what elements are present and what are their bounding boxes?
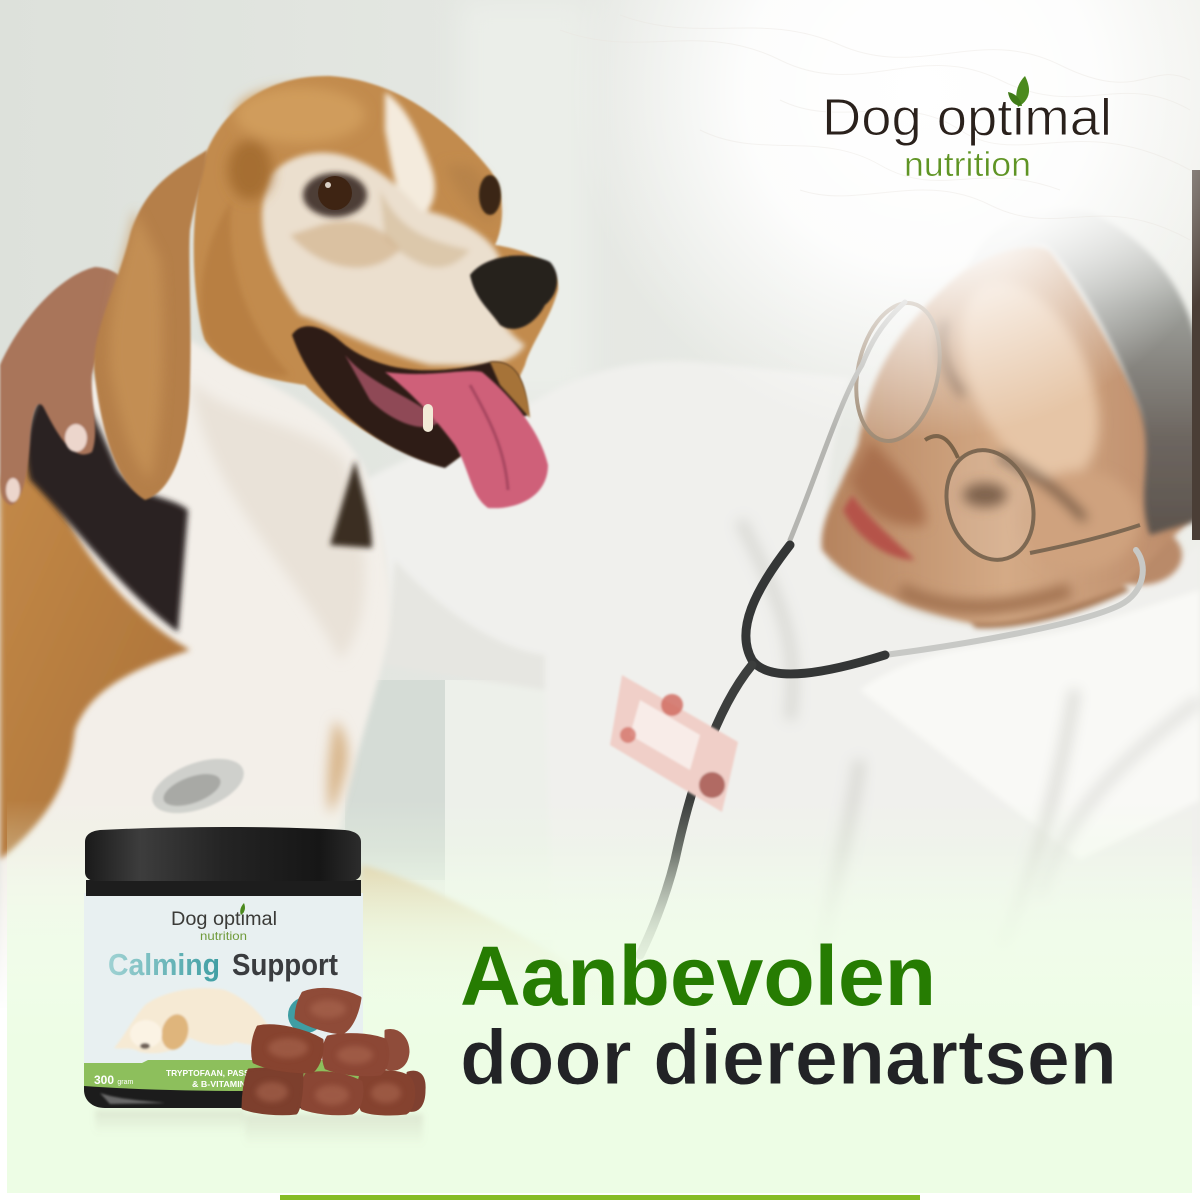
black saddle bbox=[26, 368, 188, 632]
ear bbox=[94, 150, 207, 500]
name badge bbox=[610, 675, 738, 812]
head white markings: blaze, cheek and muzzle bbox=[201, 92, 525, 376]
product jar: Calming Support: & B-VITAMINE bbox=[192, 1079, 252, 1089]
product jar: Calming Support: nutrition bbox=[200, 929, 247, 943]
jar neck bbox=[86, 880, 361, 896]
decorative wave pattern bbox=[560, 15, 1190, 240]
icon: leaves bbox=[1008, 76, 1029, 107]
glasses bbox=[844, 295, 1140, 571]
neck bbox=[960, 570, 1130, 628]
logo sub wordmark: nutrition bbox=[904, 146, 1031, 184]
soft chews stack bbox=[243, 989, 424, 1114]
nose bbox=[470, 256, 557, 329]
jar teal badge bbox=[288, 997, 324, 1033]
jar weight text: 300 gram bbox=[94, 1073, 133, 1087]
chest shading bbox=[190, 380, 365, 815]
headline bbox=[460, 929, 1117, 1101]
product jar: Calming Support: Support bbox=[232, 947, 338, 982]
dark patch neck bbox=[330, 460, 372, 548]
face shading: forehead highlight, nose, mouth bbox=[850, 260, 1140, 607]
vet forearm lower left bbox=[330, 865, 610, 1060]
jar lid bbox=[85, 827, 361, 881]
stethoscope chest piece on dog bbox=[145, 748, 251, 824]
jar label bbox=[84, 893, 363, 1073]
jar logo: Dog optimal bbox=[171, 909, 277, 930]
hair bbox=[968, 209, 1200, 535]
tongue bbox=[385, 371, 548, 508]
jar bottom bbox=[84, 1085, 362, 1108]
photo: veterinarian bbox=[330, 170, 1200, 1200]
vet hand on the shoulder bbox=[0, 267, 127, 505]
logo: Dog optimal nutrition bbox=[822, 76, 1112, 184]
logo wordmark: Dog optimal bbox=[822, 89, 1112, 147]
product jar: Calming Support bbox=[84, 827, 363, 1108]
dark sliver at right edge bbox=[1192, 170, 1200, 540]
jar ingredients text: TRYPTOFAAN, PASSI bbox=[166, 1068, 252, 1078]
headline line 2: door dierenartsen bbox=[460, 1013, 1117, 1101]
product: reflection bbox=[95, 1110, 423, 1146]
eyes bbox=[303, 173, 501, 217]
stethoscope bbox=[640, 302, 1143, 955]
headline line 1: Aanbevolen bbox=[460, 929, 936, 1023]
chew highlights bbox=[256, 1000, 401, 1105]
ear bbox=[1098, 525, 1182, 585]
jar sleeping puppy bbox=[114, 988, 275, 1053]
top right white wash bbox=[0, 0, 1200, 480]
open mouth bbox=[292, 326, 528, 468]
bottom green fade panel bbox=[7, 800, 1192, 1193]
white lab coat bbox=[365, 361, 1200, 1200]
body white bbox=[0, 340, 390, 1000]
green bottom bar bbox=[280, 1195, 920, 1200]
jar title: Calming bbox=[108, 947, 220, 982]
face bbox=[822, 245, 1190, 623]
head bbox=[194, 76, 558, 465]
tan brow patches bbox=[228, 87, 494, 225]
bottom white fade outside the frame bbox=[0, 850, 1200, 1010]
tan flank bbox=[0, 440, 190, 860]
photo: beagle bbox=[0, 76, 558, 1000]
green label strip bbox=[84, 1060, 363, 1091]
